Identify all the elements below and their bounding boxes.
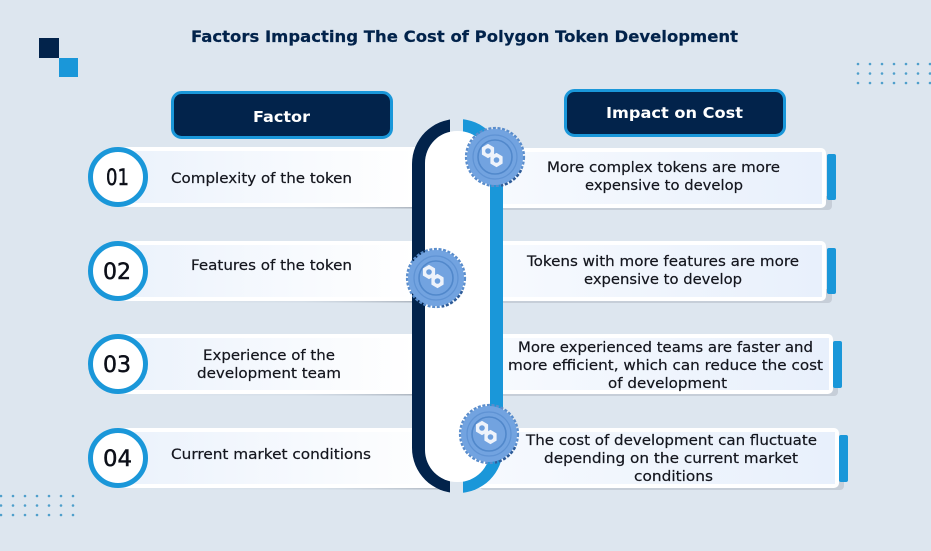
panel: impact row 4: conditions <box>634 469 713 485</box>
panel: factor row 2 <box>120 241 415 302</box>
heading: Factor <box>172 92 392 138</box>
panel: factor row 3: development team <box>197 366 341 382</box>
panel: factor row 4: Current market conditions <box>171 447 371 463</box>
icon: coin 1 <box>466 128 524 186</box>
badge: 03: 03 <box>103 353 131 378</box>
panel: factor row 3 <box>120 334 415 396</box>
panel: impact row 3: of development <box>608 376 728 392</box>
central capsule <box>412 119 503 493</box>
heading: Factor: Factor <box>253 108 310 126</box>
panel: impact row 3 <box>490 334 842 396</box>
heading: Impact on Cost <box>566 90 784 136</box>
panel: factor row 3: Experience of the <box>203 348 335 364</box>
dot grid: top right <box>857 63 931 84</box>
panel: impact row 2: Tokens with more features are more <box>526 254 799 270</box>
badge: 01 <box>90 150 146 204</box>
badge: 04: 04 <box>103 447 132 472</box>
badge: 03 <box>90 336 146 392</box>
panel: impact row 2 <box>490 241 836 303</box>
title: Factors Impacting The Cost of Polygon Token Development <box>191 27 738 46</box>
panel: impact row 3: More experienced teams are faster and <box>518 340 813 356</box>
panel: impact row 1: expensive to develop <box>585 178 743 194</box>
panel: factor row 4 <box>120 428 450 490</box>
panel: impact row 4: The cost of development can fluctuate <box>525 433 817 449</box>
panel: impact row 4 <box>463 428 848 490</box>
icon: corner squares <box>39 38 78 77</box>
panel: impact row 1 <box>490 148 836 210</box>
dot grid: bottom left <box>0 495 74 516</box>
panel: impact row 1: More complex tokens are more <box>547 160 780 176</box>
badge: 02 <box>90 244 146 298</box>
badge: 04 <box>90 430 146 486</box>
panel: impact row 3: more efficient, which can reduce the cost <box>508 358 824 374</box>
badge: 01: 01 <box>106 166 129 191</box>
panel: factor row 1 <box>120 147 415 208</box>
badge: 02: 02 <box>103 260 131 285</box>
panel: impact row 2: expensive to develop <box>584 272 742 288</box>
icon: coin 2 <box>407 249 465 307</box>
panel: factor row 2: Features of the token <box>191 258 352 274</box>
panel: factor row 1: Complexity of the token <box>171 171 352 187</box>
icon: coin 3 <box>460 405 518 463</box>
panel: impact row 4: depending on the current market <box>544 451 799 467</box>
heading: Impact on Cost: Impact on Cost <box>606 104 744 122</box>
